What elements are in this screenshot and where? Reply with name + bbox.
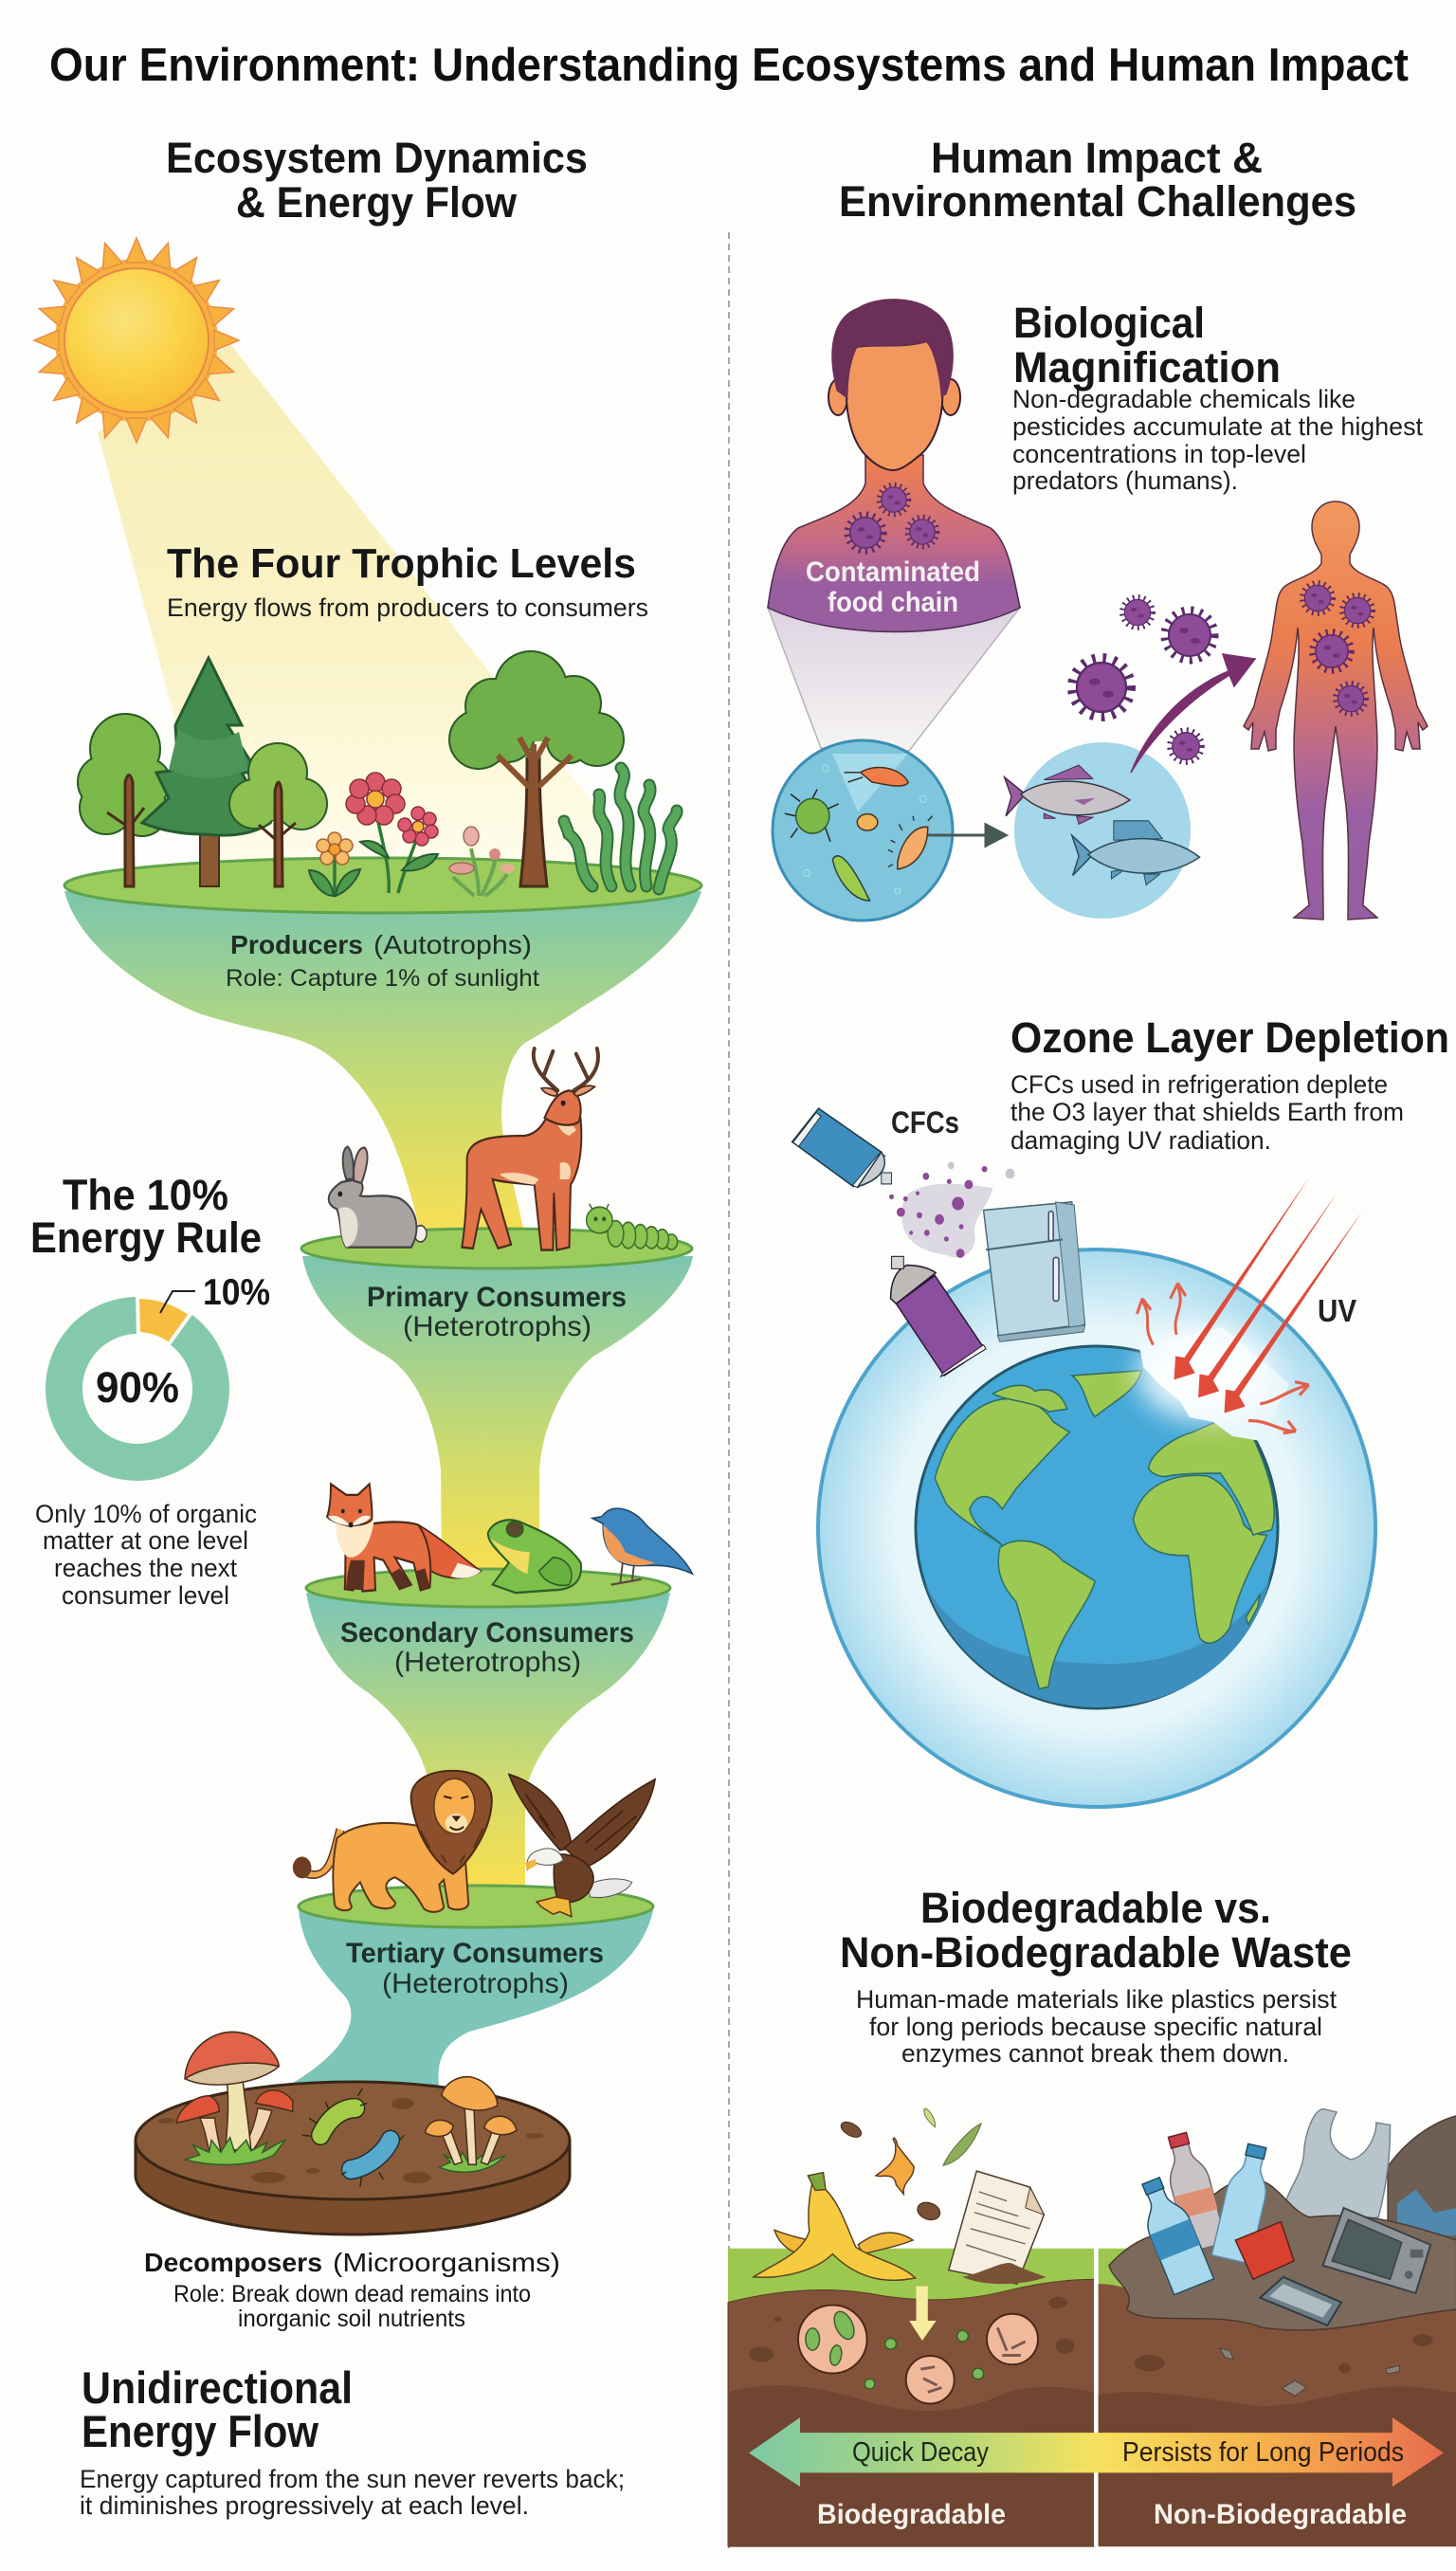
icon: caterpillar xyxy=(587,1204,678,1249)
label: secondary consumers xyxy=(340,1617,634,1678)
donut chart: 90 / 10 xyxy=(64,1272,270,1462)
heading: human impact xyxy=(839,134,1356,226)
icon: eagle xyxy=(509,1775,655,1917)
funnel: secondary consumers xyxy=(306,1593,670,1896)
label: UV: UV xyxy=(1318,1293,1356,1328)
text: ozone body: the O3 layer that shields Earth from xyxy=(1010,1098,1404,1126)
label: producers: Producers xyxy=(230,930,363,959)
icon: fish circle xyxy=(1005,742,1200,919)
icon: seaweed xyxy=(564,768,677,889)
heading: biological magnification: Magnification xyxy=(1013,343,1281,392)
text: waste body: enzymes cannot break them down. xyxy=(901,2039,1289,2068)
icon: left tree xyxy=(79,715,170,886)
label: primary consumers xyxy=(367,1282,627,1342)
text block: unidirectional energy flow xyxy=(80,2362,625,2520)
soil disc xyxy=(136,2082,570,2234)
text: biological magnification body xyxy=(1012,385,1423,495)
ozone shell xyxy=(818,1249,1375,1807)
scene: non-biodegradable xyxy=(1099,2109,1456,2546)
label: tertiary consumers xyxy=(346,1938,604,1999)
heading: 10% energy rule xyxy=(30,1171,262,1262)
icon: lion xyxy=(293,1771,492,1912)
label: tertiary consumers: Tertiary Consumers xyxy=(346,1938,604,1969)
arrow: fish to human xyxy=(1131,654,1255,773)
secondary consumers platform xyxy=(306,1569,670,1607)
text: ozone body xyxy=(1010,1070,1404,1155)
heading: human impact: Environmental Challenges xyxy=(839,177,1356,226)
icon: contaminated person bust: Contaminated xyxy=(806,556,980,588)
icon: human body xyxy=(1244,501,1428,920)
icon: fox xyxy=(327,1484,481,1591)
sunlight beam xyxy=(98,344,647,872)
icon: mushrooms and microbes xyxy=(176,2032,517,2187)
text: biological magnification body: Non-degradable chemicals like xyxy=(1012,385,1356,413)
label: waste categories: Biodegradable xyxy=(817,2499,1006,2530)
text block: unidirectional energy flow: Energy Flow xyxy=(82,2406,318,2456)
heading: biological magnification: Biological xyxy=(1013,299,1205,347)
label: secondary consumers: (Heterotrophs) xyxy=(394,1647,581,1678)
panel: ozone layer depletion xyxy=(792,1013,1449,1807)
ozone hole xyxy=(1138,1327,1289,1441)
icon: flowers xyxy=(309,773,438,896)
heading: ecosystem dynamics: Ecosystem Dynamics xyxy=(166,134,588,182)
text: biological magnification body: predators (humans). xyxy=(1012,466,1238,495)
label: decomposers: inorganic soil nutrients xyxy=(238,2306,465,2332)
label: CFCs: CFCs xyxy=(891,1105,959,1140)
label: decay spectrum xyxy=(852,2437,1404,2468)
column divider xyxy=(728,232,730,2550)
label: waste categories xyxy=(817,2499,1407,2530)
heading: human impact: Human Impact & xyxy=(931,134,1263,182)
text: ozone body: damaging UV radiation. xyxy=(1010,1126,1271,1155)
label: tertiary consumers: (Heterotrophs) xyxy=(382,1968,569,1999)
text block: unidirectional energy flow: Energy captured from the sun never reverts back; xyxy=(80,2465,625,2493)
label: primary consumers: (Heterotrophs) xyxy=(403,1311,592,1342)
icon: small plant xyxy=(449,827,515,896)
magnifier cone xyxy=(768,608,1020,751)
text: 10% rule explanation xyxy=(35,1500,257,1610)
icon: contaminant particles xyxy=(1072,597,1214,762)
heading: four trophic levels: The Four Trophic Levels xyxy=(167,540,636,587)
donut chart: 90 / 10: 10% xyxy=(203,1272,270,1313)
text block: unidirectional energy flow: it diminishes progressively at each level. xyxy=(80,2491,529,2520)
icon: contaminated person bust xyxy=(768,300,1020,631)
label: decomposers: Role: Break down dead remains into xyxy=(173,2281,531,2307)
text: 10% rule explanation: reaches the next xyxy=(54,1554,237,1582)
panel: biodegradable vs non-biodegradable xyxy=(728,1884,1456,2546)
separator xyxy=(1094,2249,1098,2546)
text: waste body xyxy=(856,1985,1337,2068)
arrow: plankton to fish xyxy=(928,825,1006,846)
heading: 10% energy rule: The 10% xyxy=(63,1171,228,1219)
scene: biodegradable xyxy=(728,2108,1094,2546)
icon: small tree xyxy=(230,744,326,886)
icon: earth xyxy=(916,1346,1278,1708)
text: waste body: Human-made materials like plastics persist xyxy=(856,1985,1337,2014)
icon: plankton circle xyxy=(773,740,953,921)
text: 10% rule explanation: matter at one level xyxy=(43,1526,248,1555)
title: Our Environment: Understanding Ecosystems and Human Impact xyxy=(49,40,1409,91)
funnel: producers bowl xyxy=(64,891,701,1237)
icon: sun xyxy=(34,238,239,443)
label: producers xyxy=(226,930,539,992)
tertiary consumers platform xyxy=(299,1886,653,1927)
label: decomposers xyxy=(144,2248,560,2332)
icon: deer xyxy=(462,1048,598,1250)
text block: unidirectional energy flow: Unidirectional xyxy=(82,2362,353,2413)
heading: 10% energy rule: Energy Rule xyxy=(30,1213,262,1262)
label: primary consumers: Primary Consumers xyxy=(367,1282,627,1313)
heading: four trophic levels: Energy flows from producers to consumers xyxy=(167,593,648,622)
text: ozone body: CFCs used in refrigeration deplete xyxy=(1010,1070,1388,1099)
icon: rabbit xyxy=(329,1147,427,1248)
heading: ecosystem dynamics xyxy=(166,134,588,227)
icon: bird xyxy=(592,1508,692,1585)
heading: ecosystem dynamics: & Energy Flow xyxy=(236,178,518,227)
label: producers: (Autotrophs) xyxy=(373,930,532,959)
icon: frog xyxy=(488,1520,581,1593)
donut chart: 90 / 10: 90% xyxy=(96,1363,179,1412)
panel: biological magnification xyxy=(768,299,1428,921)
label: decomposers: Decomposers xyxy=(144,2248,322,2277)
label: decay spectrum: Quick Decay xyxy=(852,2437,989,2468)
label: decomposers: (Microorganisms) xyxy=(333,2248,560,2277)
icon: pine tree xyxy=(142,658,270,886)
primary consumers platform xyxy=(301,1229,692,1268)
icon: spray cans, cloud and fridge xyxy=(792,1108,1084,1377)
arrow: decay spectrum xyxy=(749,2417,1444,2487)
producers platform xyxy=(64,858,701,913)
text: biological magnification body: pesticides accumulate at the highest xyxy=(1012,412,1423,441)
text: 10% rule explanation: Only 10% of organic xyxy=(35,1500,257,1528)
heading: biological magnification xyxy=(1013,299,1281,392)
icon: contaminated person bust: food chain xyxy=(828,587,958,618)
text: biological magnification body: concentrations in top-level xyxy=(1012,440,1306,468)
text: waste body: for long periods because specific natural xyxy=(869,2013,1322,2041)
heading: waste: Biodegradable vs. xyxy=(920,1884,1271,1932)
icon: UV arrows xyxy=(1137,1177,1362,1433)
label: secondary consumers: Secondary Consumers xyxy=(340,1617,634,1649)
label: producers: Role: Capture 1% of sunlight xyxy=(226,965,539,992)
funnel: tertiary consumers xyxy=(288,1910,653,2086)
heading: waste: Non-Biodegradable Waste xyxy=(840,1928,1352,1977)
label: decay spectrum: Persists for Long Periods xyxy=(1122,2437,1404,2468)
label: waste categories: Non-Biodegradable xyxy=(1154,2499,1407,2530)
icon: large tree xyxy=(450,652,623,886)
heading: waste xyxy=(840,1884,1352,1977)
funnel: primary consumers xyxy=(302,1256,693,1578)
heading: four trophic levels xyxy=(167,540,648,622)
text: 10% rule explanation: consumer level xyxy=(62,1581,229,1610)
